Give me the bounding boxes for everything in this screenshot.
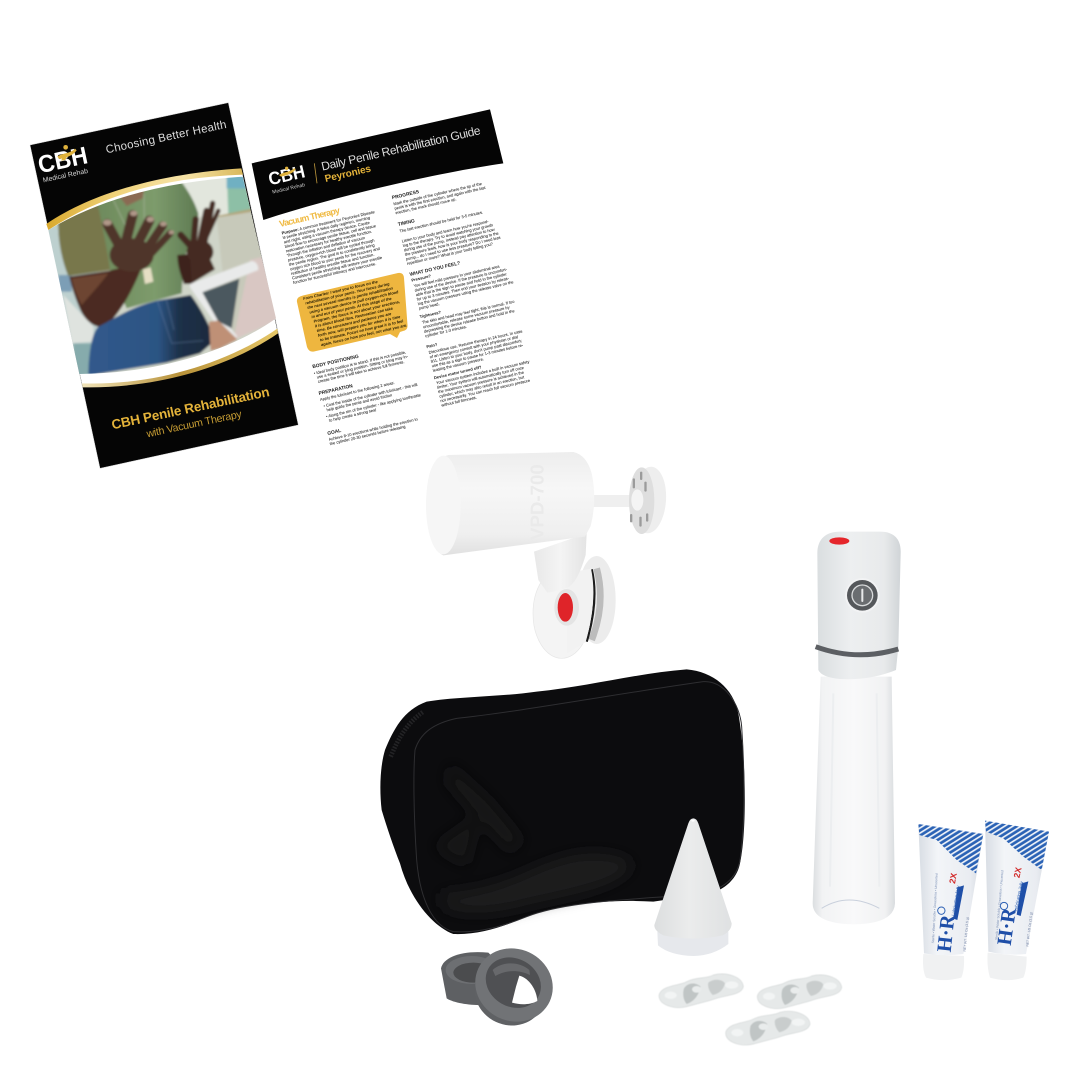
tube 1 strength: 2X <box>947 872 959 884</box>
dog tag <box>143 267 153 284</box>
text block: progress: penis is with the first erection, and again with the last <box>394 185 487 211</box>
embossed model text: VPD-700 <box>526 464 547 540</box>
text block: progress: erection, the mark should move up. <box>395 196 457 215</box>
cone body <box>654 818 732 938</box>
tapered cone insert <box>654 818 732 956</box>
tablet <box>190 261 258 344</box>
tube 2 net weight: NET WT. 1/8 Oz (3.5 g) <box>1026 912 1034 947</box>
text block: timing: TIMING <box>397 218 416 228</box>
callout text: in and out of your penis. At this stage of the <box>311 296 393 319</box>
text block: pain: Pain? <box>426 342 438 349</box>
text block: timing: Listen to your body and learn how you're respond- <box>401 219 490 244</box>
text block: purpose: pressure, oxygen-rich blood will be cycled through <box>287 238 375 262</box>
cover white band <box>47 173 277 385</box>
electric vacuum pump and cylinder <box>813 532 901 924</box>
lubricant tubes <box>918 821 1049 980</box>
text block: pain: of an emergency consult with your physician or dial <box>429 334 519 359</box>
text block: timing: during use of the pump, instead pay attention to how <box>403 227 495 253</box>
cover photo: man gesturing <box>48 176 276 374</box>
rear disc <box>578 556 616 644</box>
bottom gold curve <box>82 329 278 387</box>
text block: progress: Mark the outside of the cylinder where the tip of the <box>393 181 483 206</box>
text block: pressure: You will feel mild pressure in your abdominal area <box>413 263 501 288</box>
header divider <box>314 163 317 183</box>
callout text: using a vacuum device to pull oxygen-rich blood <box>309 289 399 315</box>
tube 2 blue bar <box>1017 881 1028 916</box>
pump handle rod <box>593 495 636 507</box>
callout text: rehabilitation of your penis. Your focus during <box>305 281 391 306</box>
text block: purpose: restoration necessary for healthy erectile function. <box>285 229 372 253</box>
text block: body positioning <box>312 343 410 384</box>
tube 1 cap <box>923 954 964 980</box>
pump neck <box>534 533 587 593</box>
bag zipper <box>391 712 423 757</box>
ring inner wall <box>493 963 530 976</box>
tube 2 cap <box>987 953 1027 980</box>
grey sealing rings <box>441 936 565 1037</box>
callout text: time. Be consistent and patience you are <box>316 311 392 333</box>
text block: pain: leasing the vacuum pressure. <box>432 356 484 373</box>
text block: device motor <box>433 354 535 408</box>
text block: purpose: and night, using a vacuum therapy device. Create <box>283 220 371 244</box>
text block: tightness: depressing the device release button and hold in the <box>423 308 516 334</box>
text block: purpose: blood flow to encourage penile tissue, cell and tissue <box>284 223 377 249</box>
near hand <box>107 215 170 255</box>
tube 1 stripes <box>918 824 983 873</box>
white manual pump <box>426 452 668 658</box>
header black band <box>252 109 503 220</box>
callout text: forth now, will prepare you for when it is time <box>317 314 402 338</box>
text block: progress <box>391 174 488 215</box>
text block: preparation: Apply the lubricant to the following 2 areas: <box>319 380 395 402</box>
text block: preparation: help guide the penis and avoid friction <box>326 392 393 412</box>
pump head <box>817 532 901 679</box>
tube 2 product name: Lubricating Jelly <box>1013 881 1024 912</box>
text block: pain: use this as a sign to pause for 1-3 minutes before re- <box>431 342 524 368</box>
text block: tightness: Tightness? <box>419 309 442 319</box>
text block: goal: Achieve 8-10 erections while holding the erection in <box>328 416 418 442</box>
photo background <box>96 216 268 373</box>
text block: pressure: able that is the sign to pause and hold in the cylinder <box>415 271 508 297</box>
far hand <box>181 203 218 253</box>
tube 2 <box>985 821 1049 980</box>
view through ring <box>512 976 537 1004</box>
text block: pain: 911. Listen to your body, don't pump past discomfort; <box>430 338 522 364</box>
text block: tightness: uncomfortable, release some vacuum pressure by <box>422 305 510 329</box>
callout text: again, focus on how you feel, not what you are. <box>320 322 408 347</box>
text block: device motor: not necessarily. You can reach full vacuum pressure <box>440 378 531 403</box>
text block: purpose: the penile region. The goal is to consistently bring <box>288 242 375 267</box>
text block: body positioning: use a seated or lying position. Sitting or lying may in- <box>316 354 409 380</box>
callout text: to be intimate. Focus on how great it is to feel <box>319 318 405 342</box>
text block: preparation: • Along the rim of the cylinder - like applying toothpaste <box>325 392 422 419</box>
callout text: From Charles: I want you to focus on the <box>303 279 379 301</box>
text block: preparation: • Coat the inside of the cylinder with lubricant - this will <box>323 382 418 408</box>
tube 1 brand: H·R <box>933 913 959 953</box>
header logo figure <box>279 167 296 177</box>
red release button <box>554 589 579 626</box>
tube 2 strength: 2X <box>1012 866 1024 879</box>
power button <box>845 578 880 613</box>
header title: Daily Penile Rehabilitation Guide <box>320 123 482 174</box>
tube 2 brand: H·R <box>993 906 1021 947</box>
logo figure <box>57 145 77 161</box>
text block: what do you feel: WHAT DO YOU FEEL? <box>409 260 461 278</box>
text block: timing: repetition or more? What is your body telling you? <box>406 241 494 266</box>
tube 1 body <box>918 824 983 955</box>
header logo subtitle: Medical Rehab <box>272 182 306 196</box>
pump knob <box>629 466 668 534</box>
text block: timing: pump... do I need to use less pressure? Do I need less <box>405 235 501 261</box>
text block: goal <box>327 411 419 446</box>
tube 1 <box>918 824 983 980</box>
text block: device motor: Device motor turned off? <box>433 364 482 380</box>
cover black background <box>30 103 298 468</box>
text block: device motor: cylinder, which may also result in an erection, but <box>439 374 525 399</box>
text block: body positioning: BODY POSITIONING <box>312 354 360 370</box>
text block: purpose: Through the inflation and deflation of vacuum <box>286 235 366 258</box>
text block: device motor: Your vacuum system includes a built in vacuum safety <box>436 359 530 385</box>
tube 1 blue bar <box>953 885 964 920</box>
text block: tightness <box>419 293 519 339</box>
text block: device motor: without full firmness. <box>441 395 477 408</box>
back ring <box>441 952 517 1005</box>
sleeve 1 <box>659 974 743 1008</box>
text block: timing: The last erection should be held for 3-5 minutes. <box>399 209 483 234</box>
sheet header <box>252 109 503 220</box>
callout bubble <box>297 273 408 352</box>
near arm <box>69 265 143 327</box>
text block: timing: the pressure feels, how is your body responding to the <box>404 230 500 257</box>
text block: purpose: A common treatment for Peyronies Disease <box>298 209 376 232</box>
sleeve 3 <box>726 1011 810 1045</box>
text block: timing <box>397 200 502 266</box>
cylinder end cap <box>426 456 461 554</box>
text block: timing: ing to the therapy. Try to avoid watching your growth <box>402 222 493 248</box>
tube 2 stripes <box>985 821 1049 870</box>
sleeve 2 <box>757 975 842 1009</box>
callout: from Charles <box>297 273 408 352</box>
guide sheet <box>252 109 535 446</box>
text block: purpose: oxygen rich blood to your penis for the recovery and <box>289 246 380 271</box>
text block: tightness: cylinder for 1-3 minutes. <box>425 324 467 338</box>
text block: pressure: Pressure? <box>411 273 432 283</box>
red indicator <box>829 537 849 545</box>
text block: pressure: pump head. <box>418 301 440 311</box>
text block: progress: PROGRESS <box>391 189 420 201</box>
text block: tightness: The skin and head may feel tight; this is normal. If too <box>421 299 516 325</box>
logo subtitle: Medical Rehab <box>42 168 89 184</box>
bag sheen <box>433 763 633 913</box>
tube 1 logo ring <box>938 907 945 914</box>
tube 2 small print: Sterile • Water Soluble • Greaseless • Unscented <box>995 870 1004 940</box>
tube 1 small print: Sterile • Water Soluble • Greaseless • Unscented <box>931 873 939 943</box>
front disc <box>533 568 590 658</box>
text block: purpose: Purpose: <box>281 227 299 235</box>
front ring <box>463 936 565 1037</box>
jeans <box>88 295 215 375</box>
text block: goal: GOAL <box>327 428 342 437</box>
bag piping <box>414 682 744 932</box>
text block: purpose: restitution of healthy erectile tissue and function. <box>290 252 375 276</box>
callout text: Program, the focus is not about your erections, <box>313 299 400 324</box>
text block: preparation: to help create a strong seal <box>328 407 377 423</box>
callout text: it is about blood flow. Restoration can take <box>314 305 394 328</box>
neck <box>120 192 144 206</box>
callout text: the next several months is penile rehabilitation <box>307 285 394 310</box>
disc shoulder <box>567 569 593 653</box>
header logo wordmark: CBH <box>266 161 307 189</box>
tube 2 logo ring <box>1000 902 1008 910</box>
brochure: cover <box>30 103 298 468</box>
tube 2 body <box>985 821 1049 955</box>
text block: body positioning: • Ideal body position is to stand. If this is not possible, <box>313 349 407 376</box>
cover subtitle: with Vacuum Therapy <box>144 408 244 440</box>
text block: purpose: is penile stretching. A twice daily regimen, morning <box>282 215 370 240</box>
text block: pain <box>426 322 528 373</box>
section heading: vacuum therapy: Vacuum Therapy <box>278 205 341 229</box>
text block: purpose: function for successful intimacy and intercourse. <box>293 261 377 285</box>
cover logo <box>36 142 90 184</box>
text block: body positioning: crease the time it will take to achieve full firmness. <box>317 359 405 384</box>
text block: device motor: the maximum vacuum pressure is achieved in the <box>438 369 525 394</box>
text block: preparation <box>318 369 423 424</box>
cover title: CBH Penile Rehabilitation <box>110 384 271 432</box>
cover tagline: Choosing Better Health <box>105 119 228 156</box>
text block: pain: Discontinue use. Resume therapy in 24 hours. In case <box>428 328 524 355</box>
header subtitle: Peyronies <box>324 164 373 185</box>
text block: goal: the cylinder 20-30 seconds before releasing <box>329 424 406 446</box>
t-shirt <box>96 184 200 310</box>
text block: pressure: ing the vacuum pressure using the release valve on the <box>417 279 515 306</box>
pump cylinder <box>427 452 594 555</box>
tube 1 net weight: NET WT. 1/8 Oz (3.5 g) <box>963 917 970 952</box>
black carry bag <box>380 669 745 934</box>
text block: device motor: limiter. Your system will automatically turn off once <box>437 365 525 390</box>
clear cylinder <box>813 677 895 924</box>
cone base <box>657 932 728 956</box>
tube 1 product name: Lubricating Jelly <box>950 885 961 916</box>
far arm <box>176 252 194 286</box>
text block: pressure: during use of the device. If the pressure is uncomfort- <box>414 266 508 293</box>
clear silicone sleeves <box>659 974 842 1045</box>
hand holding tablet <box>209 321 237 351</box>
text block: pressure: for up to 3 minutes. Then end your session by releas- <box>416 275 510 302</box>
bag body <box>380 669 745 934</box>
text block: pressure <box>411 255 516 311</box>
top gold curve <box>46 168 243 230</box>
head band <box>816 647 898 655</box>
logo wordmark: CBH <box>36 142 90 179</box>
text block: preparation: PREPARATION <box>318 383 354 397</box>
text block: purpose: Consistent penile stretching will restore your erectile <box>291 255 383 280</box>
